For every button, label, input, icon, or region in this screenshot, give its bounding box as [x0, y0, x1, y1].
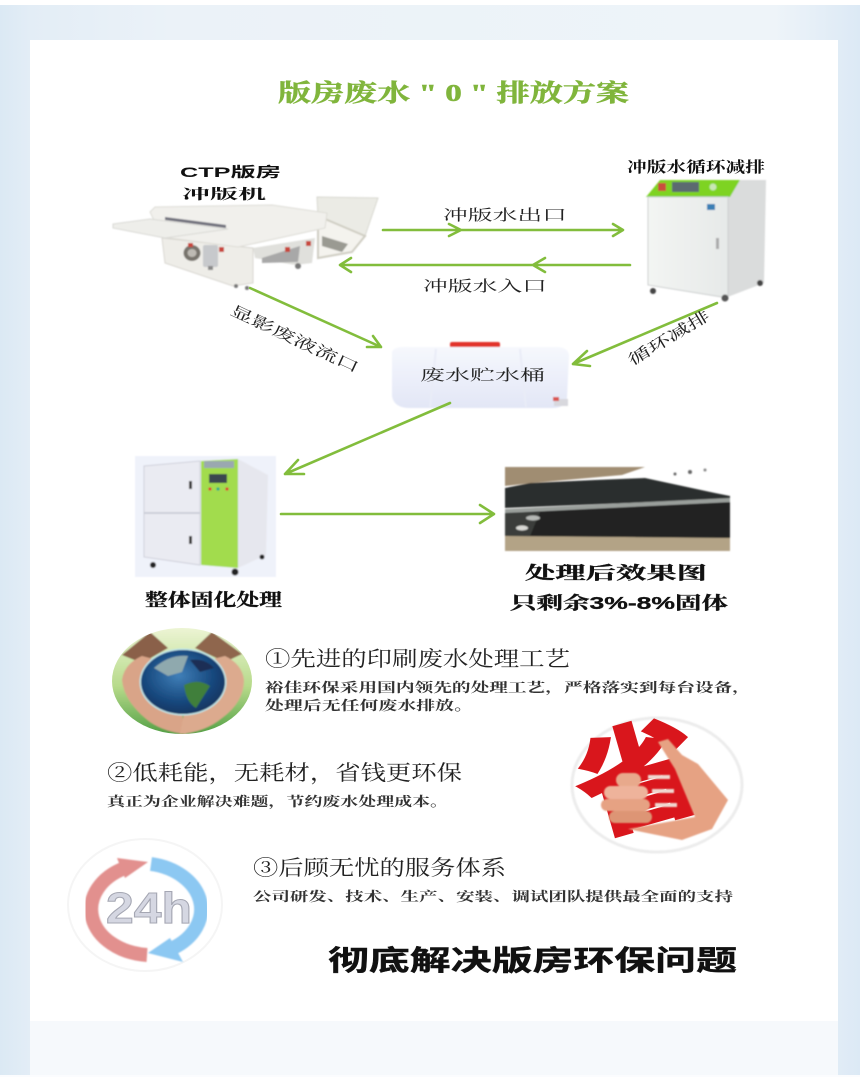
item 1: advanced process [265, 647, 751, 713]
label: result caption: 处理后效果图 [525, 563, 707, 583]
machine: water recycling unit [646, 180, 766, 302]
label: CTP plate room processor [180, 164, 281, 203]
arrow: recycling discharge [573, 303, 717, 366]
arrow: solidifier to result [281, 505, 494, 523]
arrow: plate water outlet [383, 224, 623, 236]
icon: hand gripping the character sheng: 省 [562, 703, 715, 857]
label: waste water tank: 废水贮水桶 [420, 367, 545, 384]
label: plate water outlet: 冲版水出口 [443, 207, 567, 224]
item 1: advanced process: 处理后无任何废水排放。 [265, 698, 473, 713]
icon: waste water tank [392, 342, 569, 408]
arrow: tank to solidifier [285, 403, 450, 474]
icon: 24h service cycle: 24h [106, 884, 192, 933]
item 2: low energy [107, 761, 462, 810]
item 3: service system: 公司研发、技术、生产、安装、调试团队提供最全面的支持 [253, 889, 733, 904]
item 1: advanced process: 裕佳环保采用国内领先的处理工艺，严格落实到每台设备， [265, 680, 751, 696]
closing slogan: 彻底解决版房环保问题 [328, 945, 737, 976]
label: plate water recycling: 冲版水循环减排 [627, 158, 765, 176]
item 3: service system [253, 856, 733, 904]
label: result caption [510, 563, 729, 613]
label: solidification: 整体固化处理 [145, 590, 283, 610]
item 1: advanced process: ①先进的印刷废水处理工艺 [265, 647, 570, 671]
label: result caption: 只剩余 3%-8% 固体 [510, 593, 729, 613]
arrow: developer waste outlet [250, 288, 381, 347]
label: CTP plate room processor: 冲版机 [182, 186, 266, 203]
item 2: low energy: ②低耗能，无耗材，省钱更环保 [107, 761, 462, 786]
label: developer waste outlet: 显影废液流口 [227, 301, 362, 377]
item 2: low energy: 真正为企业解决难题，节约废水处理成本。 [107, 794, 448, 810]
machine: CTP plate processor [113, 197, 378, 290]
label: CTP plate room processor: CTP版房 [180, 164, 281, 180]
icon: hands holding earth [110, 626, 254, 736]
arrow: plate water inlet [340, 258, 630, 272]
label: recycling discharge: 循环减排 [625, 307, 713, 369]
item 3: service system: ③后顾无忧的服务体系 [253, 856, 506, 880]
photo: treated solid residue [505, 467, 730, 551]
machine: solidification unit [135, 456, 276, 577]
icon: 24h service cycle [68, 839, 222, 971]
label: plate water inlet: 冲版水入口 [423, 278, 547, 295]
title: 版房废水 " 0 " 排放方案 [278, 79, 629, 107]
